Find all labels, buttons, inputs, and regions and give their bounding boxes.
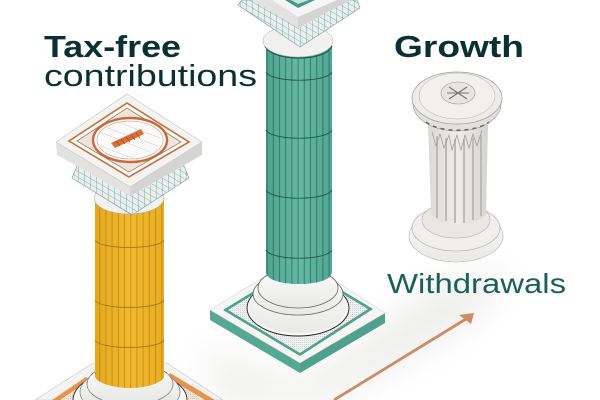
gray column shaft: [428, 125, 488, 224]
yellow column shaft: [95, 195, 164, 388]
teal column plinth: [210, 256, 385, 373]
column: gray: [409, 72, 503, 262]
floor shadow: [200, 270, 510, 400]
heading: Tax-free contributions: [44, 29, 257, 93]
yellow column mesh capital: [72, 166, 189, 215]
heading: Tax-free contributions: Tax-free: [44, 29, 181, 64]
yellow column base rings: [73, 363, 187, 400]
teal column mesh capital: [238, 0, 360, 47]
teal column collar: [263, 25, 333, 58]
teal column slab: [252, 0, 350, 28]
teal column base rings: [247, 268, 349, 336]
gray column capital: [412, 72, 502, 131]
gray column base: [409, 202, 503, 262]
column: yellow: [35, 94, 223, 400]
yellow column slab: [56, 94, 202, 196]
yellow column collar: [94, 182, 164, 214]
column: teal: [210, 0, 385, 373]
yellow column plinth: [35, 363, 223, 400]
arrow: growth trend: [334, 313, 474, 400]
teal column shaft: [266, 40, 332, 284]
heading: Tax-free contributions: contributions: [44, 58, 257, 93]
heading: Growth: Growth: [394, 29, 524, 64]
label: Withdrawals: Withdrawals: [387, 268, 566, 299]
